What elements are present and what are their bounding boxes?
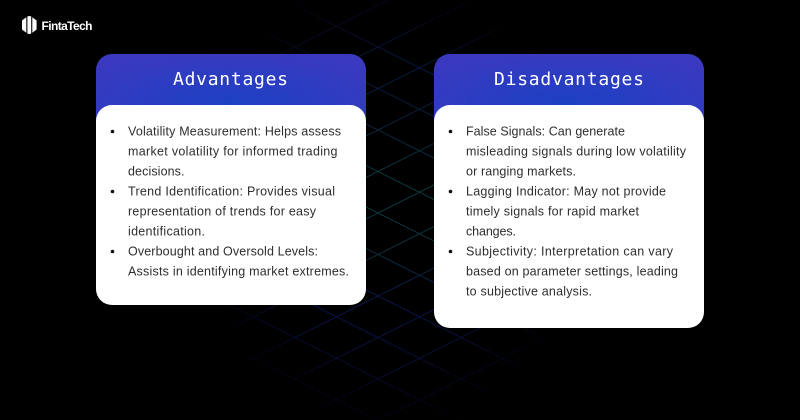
bullet: overbought and oversold: Assists in identifying market extremes. <box>128 264 349 278</box>
header: advantages <box>96 54 366 135</box>
bullet: volatility measurement <box>111 124 341 178</box>
logo <box>22 16 92 34</box>
bullet: trend identification <box>111 184 335 238</box>
bullet: subjectivity: to subjective analysis. <box>466 284 592 298</box>
bullet: volatility measurement: market volatility for informed trading <box>128 144 338 158</box>
bullet: trend identification: Trend Identification: Provides visual <box>128 184 335 198</box>
icon: striped hexagon <box>22 16 37 34</box>
panel: disadvantages <box>434 54 704 328</box>
bullet: false signals <box>449 124 687 178</box>
bullet: lagging indicator: Lagging Indicator: May not provide <box>466 184 666 198</box>
bullet: lagging indicator: timely signals for rapid market <box>466 204 640 218</box>
bullet: lagging indicator: changes. <box>466 224 516 238</box>
header: advantages: Advantages <box>173 69 288 90</box>
bullet: overbought and oversold: Overbought and Oversold Levels: <box>128 244 318 258</box>
bullet: false signals: or ranging markets. <box>466 164 576 178</box>
bullet: false signals: misleading signals during low volatility <box>466 144 687 158</box>
bullet: volatility measurement: Volatility Measurement: Helps assess <box>128 124 341 138</box>
header: disadvantages: Disadvantages <box>494 69 644 90</box>
bullet: false signals: False Signals: Can generate <box>466 124 625 138</box>
bullet: lagging indicator <box>449 184 666 238</box>
bullet: trend identification: representation of trends for easy <box>128 204 317 218</box>
bullet: overbought and oversold <box>111 244 349 278</box>
bullet: subjectivity <box>449 244 678 298</box>
list card: disadvantages <box>434 105 704 328</box>
header: disadvantages <box>434 54 704 135</box>
bullet: subjectivity: Subjectivity: Interpretation can vary <box>466 244 674 258</box>
brand name: FintaTech <box>42 19 92 33</box>
background grid <box>230 0 543 420</box>
bullet: trend identification: identification. <box>128 224 205 238</box>
list card: advantages <box>96 105 366 305</box>
panel: advantages <box>96 54 366 305</box>
bullet: volatility measurement: decisions. <box>128 164 184 178</box>
bullet: subjectivity: based on parameter settings, leading <box>466 264 678 278</box>
